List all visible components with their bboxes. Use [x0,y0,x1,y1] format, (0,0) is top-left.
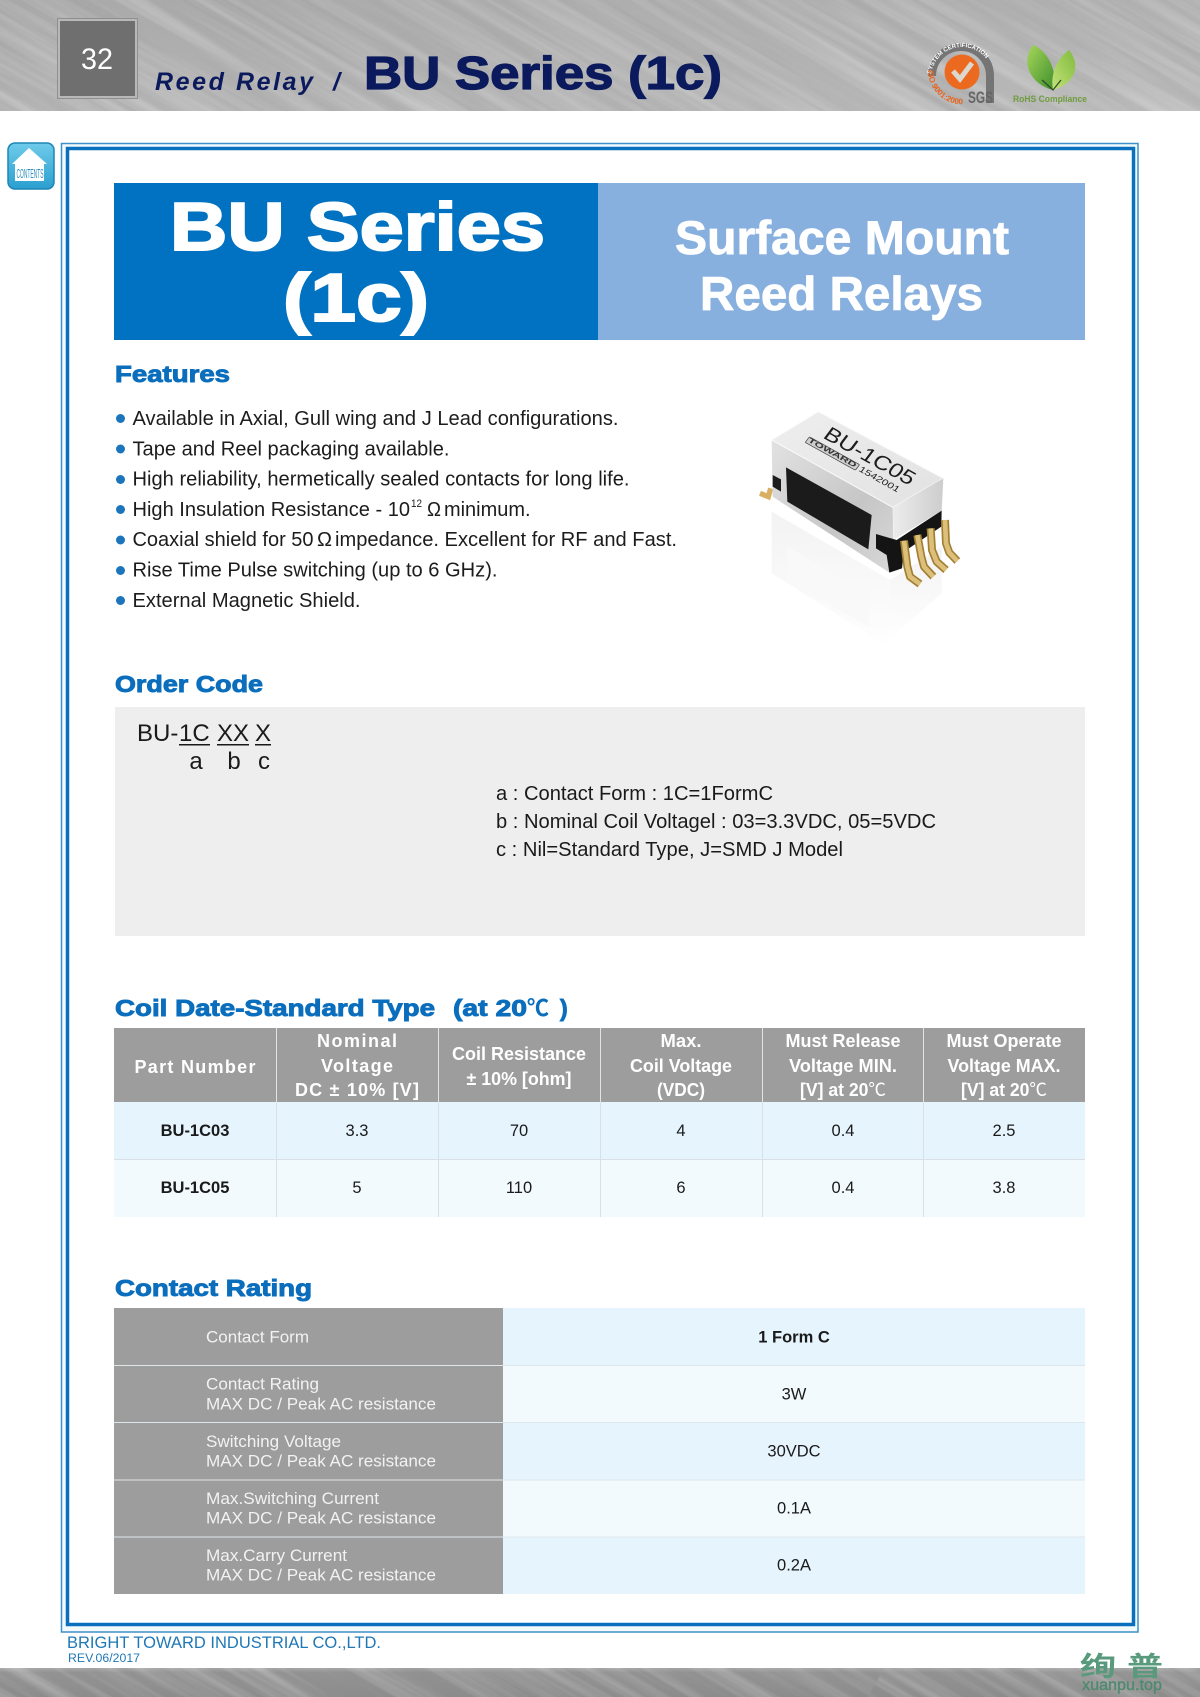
title banner [114,183,1085,340]
table header row: Part Number [134,1057,256,1077]
banner right: product type: Surface Mount [675,211,1009,264]
table row: BU-1C03: 0.4 [832,1122,854,1140]
code pattern: XX [217,720,249,747]
banner right: product type: Reed Relays [700,267,983,320]
features list: High reliability, hermetically sealed contacts for long life. [132,469,630,491]
left clip [773,475,781,492]
features heading: Features [115,361,230,387]
row: max switching current: MAX DC / Peak AC resistance [206,1508,436,1528]
features list: minimum. [444,499,530,521]
header title: Reed Relay [155,68,314,96]
row: max carry current: 0.2A [777,1556,811,1574]
logo: SGS ISO 9001 certification: ISO 9001:2000 [928,70,963,104]
order code heading: Order Code [115,671,263,697]
relay marking: 1542001 [857,464,902,494]
table header row: Coil Resistance [452,1044,586,1064]
row: contact form: Contact Form [206,1328,309,1346]
table header row: Nominal [317,1031,397,1051]
watermark [1080,1651,1163,1694]
features list: Ω [317,529,332,551]
relay marking: TOWARD [806,437,858,469]
features list: Rise Time Pulse switching (up to 6 GHz). [132,560,498,582]
code pattern: X [255,720,271,747]
features list: Available in Axial, Gull wing and J Lead configurations. [132,408,618,430]
coil data table [114,1028,1085,1217]
coil data heading: Coil Date-Standard Type [115,995,435,1021]
row: max switching current: Max.Switching Current [206,1489,379,1508]
gold pins [904,520,957,584]
row: contact rating: Contact Rating [206,1374,319,1394]
row: contact form [114,1308,1085,1365]
banner left: series name [114,183,598,340]
features list: High Insulation Resistance - 10 [132,499,410,521]
features list: 12 [411,498,422,510]
table header row: [V] at 20℃ [800,1080,886,1100]
table header row: Coil Voltage [630,1056,732,1076]
company name and revision: BRIGHT TOWARD INDUSTRIAL CO.,LTD. [67,1634,381,1652]
table row: BU-1C05: 3.8 [993,1179,1015,1197]
page number box [58,18,138,98]
row: contact rating: MAX DC / Peak AC resistance [206,1394,436,1414]
relay marking: BU-1C05 [819,423,920,490]
table row: BU-1C03: 4 [676,1122,686,1140]
table header row: Must Operate [946,1031,1062,1051]
banner right: product type [598,183,1085,340]
row: switching voltage: 30VDC [767,1442,821,1460]
table header row: DC ± 10% [V] [295,1080,419,1100]
row: max carry current [114,1538,1085,1594]
company name and revision [67,1634,381,1665]
code pattern: 1C [179,720,210,747]
features list: Tape and Reel packaging available. [132,438,450,460]
header title: BU Series (1c) [364,47,722,99]
code legend: b : Nominal Coil Voltagel : 03=3.3VDC, 05=5VDC [496,810,936,833]
row: contact rating [114,1366,1085,1422]
watermark: 绚 [1080,1651,1116,1682]
footer band: brushed metal [0,1668,1200,1697]
watermark: 普 [1127,1651,1163,1682]
contact rating table [114,1308,1085,1594]
company name and revision: REV.06/2017 [68,1653,140,1665]
page number box: 32 [81,43,113,76]
table header row: Must Release [786,1031,900,1051]
row: switching voltage [114,1423,1085,1480]
table row: BU-1C05: 5 [352,1179,362,1197]
contents home icon: CONTENTS [16,166,44,181]
table row: BU-1C03: BU-1C03 [161,1122,229,1140]
row: max carry current: MAX DC / Peak AC resistance [206,1566,436,1584]
page frame [62,144,1138,1632]
table row: BU-1C03 [114,1102,1085,1159]
code legend [496,782,936,861]
black base [876,511,942,573]
contents home icon [8,143,54,189]
table row: BU-1C05: BU-1C05 [161,1179,229,1197]
header title [155,47,722,99]
product photo: BU-1C05 relay [760,412,957,647]
logo: RoHS compliance leaves: RoHS Compliance [1013,94,1087,105]
header title: / [332,68,343,96]
relay marking [805,423,920,494]
logo: SGS ISO 9001 certification: SGS [968,88,993,107]
case end [893,478,943,539]
case side [772,440,893,573]
table header row [114,1028,1085,1102]
side window [786,467,872,549]
code legend: c : Nil=Standard Type, J=SMD J Model [496,838,843,861]
row: contact form: 1 Form C [758,1328,830,1346]
order code panel [115,707,1085,936]
code pattern [137,720,271,775]
table header row: Max. [660,1031,702,1051]
table header row: (VDC) [657,1080,705,1100]
logo: SGS ISO 9001 certification [927,42,994,107]
features list [116,408,677,612]
code pattern: c [258,748,270,775]
table row: BU-1C05: 0.4 [832,1179,854,1197]
table row: BU-1C05: 110 [506,1179,532,1197]
banner left: series name: (1c) [283,260,429,336]
table row: BU-1C03: 3.3 [346,1122,368,1140]
code pattern: a [189,748,203,775]
table header row: [V] at 20℃ [961,1080,1047,1100]
case top [772,412,943,507]
contact rating heading: Contact Rating [115,1275,312,1301]
coil data heading: (at 20 [453,995,527,1021]
table header row: Voltage [321,1056,393,1076]
banner left: series name: BU Series [170,189,545,265]
code pattern: BU- [137,720,178,747]
table header row: Voltage MIN. [789,1056,897,1076]
left pin [760,488,771,497]
features list: External Magnetic Shield. [132,590,360,612]
table row: BU-1C03: 70 [510,1122,528,1140]
features list: Ω [427,499,441,521]
table header row: ± 10% [ohm] [466,1069,572,1089]
table row: BU-1C05 [114,1159,1085,1217]
row: switching voltage: Switching Voltage [206,1432,341,1451]
features list: impedance. Excellent for RF and Fast. [335,529,677,551]
features list: Coaxial shield for 50 [132,529,314,551]
table header row: Voltage MAX. [948,1056,1060,1076]
table row: BU-1C03: 2.5 [993,1122,1015,1140]
row: contact rating: 3W [782,1386,807,1404]
header band: brushed metal [0,0,1200,111]
row: switching voltage: MAX DC / Peak AC resistance [206,1452,436,1470]
row: max switching current: 0.1A [777,1500,811,1518]
code pattern: b [227,748,241,775]
coil data heading: ) [560,995,568,1021]
logo: SGS ISO 9001 certification: SYSTEM CERTIFICATION [927,42,989,74]
logo: RoHS compliance leaves [1013,45,1087,105]
table row: BU-1C05: 6 [676,1179,686,1197]
coil data heading [115,995,568,1021]
reflection [772,512,942,647]
row: max carry current: Max.Carry Current [206,1546,347,1565]
coil data heading: ℃ [527,995,549,1021]
code legend: a : Contact Form : 1C=1FormC [496,782,773,805]
watermark: xuanpu.top [1082,1677,1162,1694]
row: max switching current [114,1480,1085,1536]
